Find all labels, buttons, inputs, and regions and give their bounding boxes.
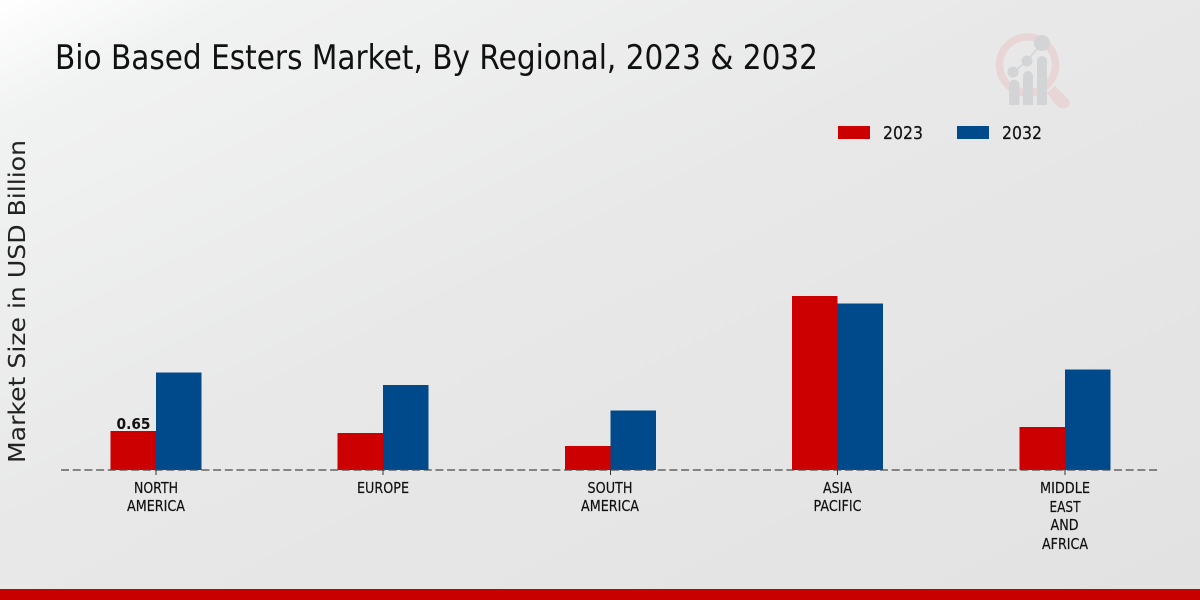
baseline axis [61, 470, 1160, 475]
category label: Middle East and Africa: EAST [1050, 498, 1081, 516]
category label: Middle East and Africa: AFRICA [1042, 535, 1089, 553]
footer band [0, 589, 1200, 600]
category label: North America: AMERICA [127, 497, 186, 515]
category label: Middle East and Africa: MIDDLE [1040, 479, 1090, 497]
bars: South America [565, 410, 656, 470]
category label: South America: SOUTH [588, 479, 632, 497]
category label: Middle East and Africa: AND [1050, 516, 1078, 534]
category label: Europe: EUROPE [357, 479, 409, 497]
category label: Asia Pacific [814, 479, 862, 515]
category label: South America: AMERICA [581, 497, 640, 515]
bars: Asia Pacific [792, 296, 883, 470]
title: Bio Based Esters Market, By Regional, 2023 & 2032 [55, 38, 818, 78]
legend item: 2032: 2032 [1002, 123, 1042, 144]
legend item: 2032 [957, 123, 1042, 144]
bar chart [61, 296, 1160, 475]
icon: watermark logo [1000, 35, 1070, 109]
category label: North America: NORTH [134, 479, 178, 497]
category label: South America [581, 479, 640, 515]
y axis title: Market Size in USD Billion [3, 140, 31, 463]
category label: Asia Pacific: PACIFIC [814, 497, 862, 515]
bars: North America [110, 372, 202, 470]
category label: Asia Pacific: ASIA [823, 479, 853, 497]
category label: North America [127, 479, 186, 515]
bars: Europe [338, 385, 428, 470]
legend item: 2023 [838, 123, 923, 144]
bars: Middle East and Africa [1020, 370, 1110, 470]
category label: Middle East and Africa [1040, 479, 1090, 553]
data label: 0.65: 0.65 [116, 415, 150, 433]
legend [838, 123, 1042, 144]
legend item: 2023: 2023 [883, 123, 923, 144]
